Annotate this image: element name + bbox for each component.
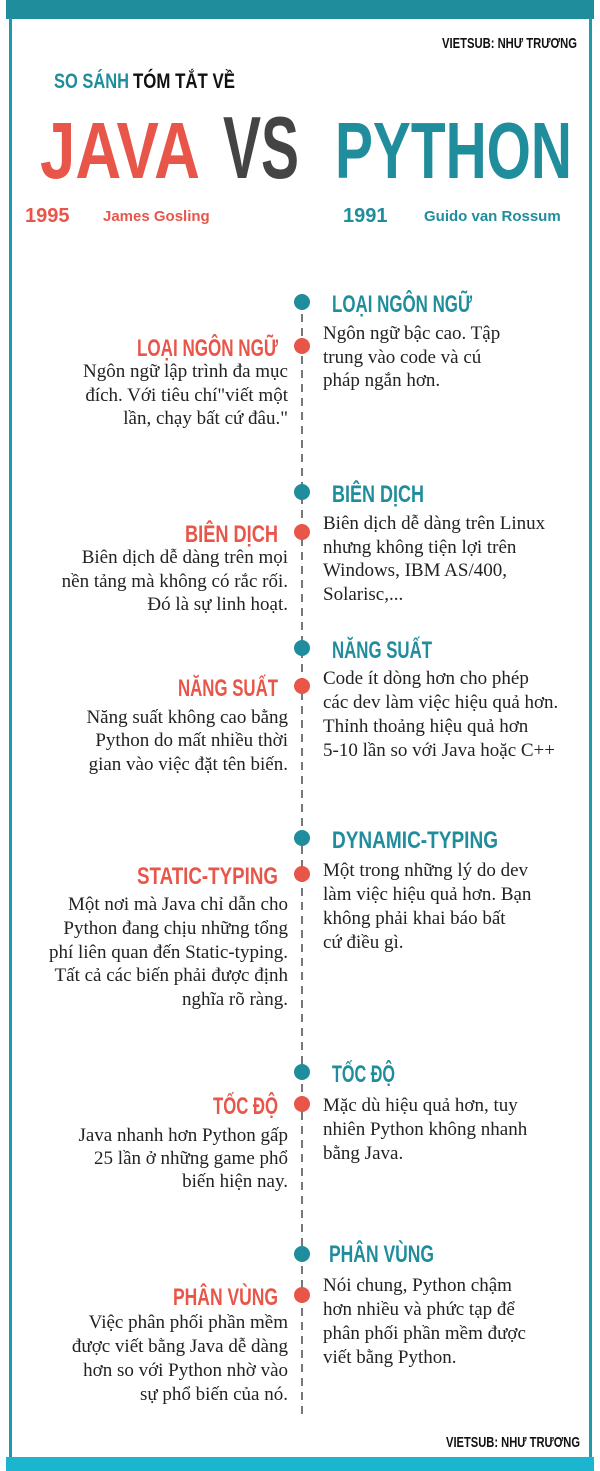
dates: 1995 bbox=[25, 205, 70, 227]
section 3: 5-10 lần so với Java hoặc C++ bbox=[323, 740, 555, 761]
section 1: trung vào code và cú bbox=[323, 347, 482, 368]
section 5: 25 lần ở những game phổ bbox=[94, 1148, 288, 1169]
section 2: nền tảng mà không có rắc rối. bbox=[62, 571, 288, 592]
section 5: Java nhanh hơn Python gấp bbox=[78, 1125, 288, 1146]
timeline bbox=[301, 300, 303, 1420]
section 5: Mặc dù hiệu quả hơn, tuy bbox=[323, 1095, 518, 1116]
section 6: Việc phân phối phần mềm bbox=[89, 1312, 288, 1333]
section 2: BIÊN DỊCH bbox=[185, 520, 278, 548]
section 4: nghĩa rõ ràng. bbox=[182, 989, 288, 1010]
section 2: nhưng không tiện lợi trên bbox=[323, 537, 517, 558]
section 1: LOẠI NGÔN NGỮ bbox=[332, 290, 472, 318]
section 5 bbox=[78, 1060, 528, 1192]
section 1: Ngôn ngữ bậc cao. Tập bbox=[323, 323, 500, 344]
section 2: Biên dịch dễ dàng trên Linux bbox=[323, 513, 546, 534]
section 6: sự phổ biến của nó. bbox=[140, 1384, 288, 1405]
section 6: Nói chung, Python chậm bbox=[323, 1275, 512, 1296]
section 2: Biên dịch dễ dàng trên mọi bbox=[82, 547, 288, 568]
section 2: BIÊN DỊCH bbox=[332, 480, 424, 508]
section 4: Tất cả các biến phải được định bbox=[55, 965, 288, 986]
section 4: không phải khai báo bất bbox=[323, 908, 506, 929]
section 6: PHÂN VÙNG bbox=[173, 1283, 278, 1311]
section 1: pháp ngắn hơn. bbox=[323, 370, 440, 391]
section 4: DYNAMIC-TYPING bbox=[332, 827, 498, 854]
title: JAVA bbox=[40, 106, 200, 195]
section 3: Thỉnh thoảng hiệu quả hơn bbox=[323, 716, 529, 737]
section 4: STATIC-TYPING bbox=[137, 863, 278, 890]
section 5: bằng Java. bbox=[323, 1143, 403, 1164]
section 3: gian vào việc đặt tên biến. bbox=[89, 754, 288, 775]
section 2: Solarisc,... bbox=[323, 584, 403, 605]
section 6: phân phối phần mềm được bbox=[323, 1323, 526, 1344]
section 4: Một nơi mà Java chỉ dẫn cho bbox=[68, 894, 288, 915]
title: VS bbox=[223, 98, 299, 197]
dates: Guido van Rossum bbox=[424, 208, 561, 225]
section 1: LOẠI NGÔN NGỮ bbox=[137, 334, 278, 362]
section 3 bbox=[86, 636, 558, 775]
section 3: Python do mất nhiều thời bbox=[95, 730, 288, 751]
dates bbox=[25, 205, 561, 227]
dates: James Gosling bbox=[103, 208, 210, 225]
section 4: phí liên quan đến Static-typing. bbox=[49, 942, 288, 963]
section 6: hơn nhiều và phức tạp để bbox=[323, 1299, 515, 1320]
section 6: hơn so với Python nhờ vào bbox=[83, 1360, 288, 1381]
section 3: NĂNG SUẤT bbox=[178, 674, 278, 702]
section 4: Một trong những lý do dev bbox=[323, 860, 529, 881]
section 5: TỐC ĐỘ bbox=[213, 1092, 278, 1120]
section 3: các dev làm việc hiệu quả hơn. bbox=[323, 692, 558, 713]
section 1 bbox=[83, 290, 500, 429]
section 5: nhiên Python không nhanh bbox=[323, 1119, 528, 1140]
section 5: biến hiện nay. bbox=[182, 1171, 288, 1192]
section 2 bbox=[62, 480, 546, 615]
section 1: đích. Với tiêu chí"viết một bbox=[85, 385, 289, 406]
section 5: TỐC ĐỘ bbox=[332, 1060, 395, 1088]
section 6: được viết bằng Java dễ dàng bbox=[72, 1336, 288, 1357]
title bbox=[40, 98, 572, 197]
section 1: lần, chạy bất cứ đâu." bbox=[123, 408, 288, 429]
section 6 bbox=[72, 1240, 526, 1405]
section 3: Năng suất không cao bằng bbox=[86, 707, 288, 728]
section 4: làm việc hiệu quả hơn. Bạn bbox=[323, 884, 532, 905]
section 2: Đó là sự linh hoạt. bbox=[147, 594, 288, 615]
subtitle: SO SÁNH bbox=[54, 70, 129, 93]
section 2: Windows, IBM AS/400, bbox=[323, 560, 507, 581]
section 6: viết bằng Python. bbox=[323, 1347, 457, 1368]
dates: 1991 bbox=[343, 205, 388, 227]
subtitle: TÓM TẮT VỀ bbox=[133, 69, 235, 93]
subtitle bbox=[54, 69, 235, 93]
section 4: Python đang chịu những tổng bbox=[63, 918, 288, 939]
section 4 bbox=[49, 827, 532, 1010]
section 3: NĂNG SUẤT bbox=[332, 636, 432, 664]
section 6: PHÂN VÙNG bbox=[329, 1240, 434, 1268]
section 4: cứ điều gì. bbox=[323, 932, 403, 953]
section 1: Ngôn ngữ lập trình đa mục bbox=[83, 361, 288, 382]
section 3: Code ít dòng hơn cho phép bbox=[323, 668, 529, 689]
